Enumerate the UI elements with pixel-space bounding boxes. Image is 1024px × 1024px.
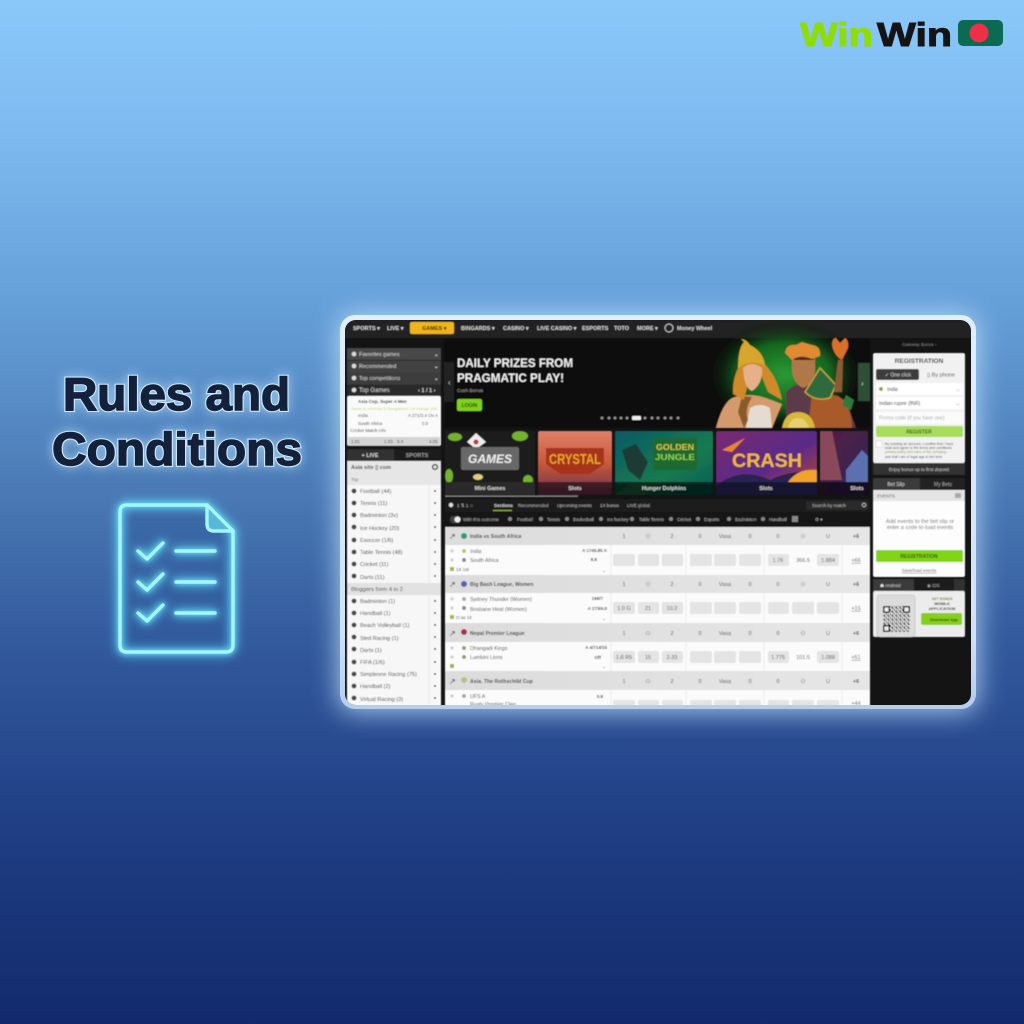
game category tiles: Slots (850, 486, 864, 492)
right column: gateway link: Gateway Bonus › (902, 342, 937, 347)
league: Big Bash League, Women: 0 (748, 582, 752, 588)
sport filter chips: Football (517, 517, 533, 522)
league: Asia The Rothschild Cup: 1 (622, 679, 626, 685)
league: Big Bash League, Women: ⌄ (602, 616, 606, 621)
league: Big Bash League, Women: 166/7 (592, 596, 603, 601)
league: Big Bash League, Women: 1 (622, 582, 626, 588)
man hair (785, 342, 820, 360)
left sidebar: sports tabs: + LIVE (362, 453, 379, 459)
left sidebar: top game card: Cricket Match info (350, 428, 387, 433)
filter toolbar: 1 ⇅ 1 ☆ (457, 503, 475, 508)
top navigation bar: MORE ▾ (637, 326, 659, 332)
league: India vs South Africa: 2 (670, 534, 674, 540)
registration panel: read and agree to the terms and conditions (885, 446, 952, 450)
league: Nepal Premier League (449, 629, 861, 669)
league: Asia The Rothschild Cup: 0.9 (597, 694, 603, 699)
sport filter chips: Tennis (547, 517, 561, 522)
staff flower (832, 338, 848, 360)
hero characters (716, 338, 856, 428)
left sidebar: sports list: Esoccer (1/6) (360, 538, 393, 544)
match odds table (445, 527, 870, 708)
left sidebar: sports list: Tennis (11) (360, 501, 387, 507)
league: Nepal Premier League: 101.5 (796, 655, 810, 661)
man face (792, 356, 815, 388)
registration panel (873, 353, 965, 475)
league: Big Bash League, Women: ↗ (449, 580, 456, 589)
logo: WinWin with flag: Win (800, 16, 873, 53)
left sidebar: top game card: South Africa (358, 421, 383, 426)
filter toolbar: Search by match (812, 503, 846, 508)
league: Nepal Premier League: 1 (622, 631, 626, 637)
league: Nepal Premier League: 0 (776, 631, 780, 637)
game category tiles: Slots (759, 486, 773, 492)
league: Big Bash League, Women: 21 (645, 606, 651, 612)
sport filter chips: ⚙ ▾ (815, 517, 823, 522)
title: Rules and Conditions (52, 368, 302, 475)
league: India vs South Africa: U (826, 534, 830, 540)
registration panel: India (887, 387, 898, 393)
league: Big Bash League, Women: ⚇ (646, 581, 651, 588)
QR code ticket (877, 595, 915, 637)
league: India vs South Africa: 0 (698, 534, 702, 540)
sport filter chips: Table Tennis (639, 517, 665, 522)
sport filter chips: Ice hockey (607, 517, 629, 522)
left sidebar: sports list: Cricket (11) (360, 562, 389, 568)
game category tiles: Slots (568, 486, 582, 492)
league: Nepal Premier League: 0 (698, 631, 702, 637)
league: Big Bash League, Women: U (826, 582, 830, 588)
sport filter chips (444, 515, 870, 528)
league: Nepal Premier League: 2 (670, 631, 674, 637)
league: Nepal Premier League: ↗ (449, 629, 456, 638)
sport filter chips: Esports (704, 517, 720, 522)
left sidebar: sports tabs: SPORTS (406, 453, 429, 459)
registration panel: Indian rupee (INR) (879, 401, 920, 407)
man armor (805, 368, 836, 399)
hero banner: › (861, 379, 864, 388)
league: Asia The Rothschild Cup: U (826, 679, 830, 685)
left sidebar: promo menu: Top Games (359, 388, 390, 394)
league: India vs South Africa: +6 (853, 534, 859, 540)
league: Asia The Rothschild Cup: 0 (748, 679, 752, 685)
left sidebar: top game card: 4.05 (429, 439, 438, 444)
sport filter chips: Handball (769, 517, 787, 522)
left sidebar: promo menu: ⌄ (434, 352, 439, 358)
league: Nepal Premier League: +51 (851, 655, 861, 661)
game category tiles (445, 431, 868, 497)
hero button: LOGIN (462, 403, 478, 409)
registration panel: ▯ By phone (927, 372, 955, 378)
left sidebar: top game card: 0.0 (422, 421, 428, 426)
league: Nepal Premier League: 1.8 R5 (616, 655, 632, 661)
title: Rules and Conditions: Conditions (52, 423, 302, 475)
league: India vs South Africa: 6.6 (591, 557, 597, 562)
left sidebar: sports list: Ice Hockey (20) (360, 526, 399, 532)
league: Nepal Premier League: ⌄ (602, 664, 606, 669)
league: Asia The Rothschild Cup: +44 (851, 701, 861, 707)
hero banner: ‹ (448, 378, 451, 387)
left sidebar: sports list: Badminton (1) (360, 599, 395, 605)
league: India vs South Africa: A 1745.85 A (582, 548, 608, 553)
sport filter chips: Cricket (677, 517, 692, 522)
league: Nepal Premier League: 15 (645, 655, 651, 661)
logo: WinWin with flag (800, 16, 1003, 53)
league: India vs South Africa: 1 (622, 534, 626, 540)
left sidebar: sports list: Asia site ▯ com (351, 465, 391, 471)
icon: checklist document (120, 505, 233, 652)
league: Nepal Premier League: 1.088 (821, 655, 835, 661)
tile label CRASH: CRASH (732, 450, 802, 472)
league: Nepal Premier League: ⚇ (646, 630, 651, 637)
title: Rules and Conditions: Rules and (63, 368, 290, 420)
registration panel: Enjoy bonus up to first deposit (889, 467, 950, 472)
filter toolbar (445, 499, 870, 512)
woman hair (733, 360, 782, 400)
league: Nepal Premier League: Nepal Premier League (470, 631, 525, 637)
title: Rules and Conditions: Rules and (63, 368, 290, 420)
league: Nepal Premier League: ⚇ (801, 630, 806, 637)
league: Nepal Premier League: 1.775 (771, 655, 785, 661)
bet slip panel: REGISTRATION (900, 554, 938, 560)
league: India vs South Africa: 1.76 (773, 558, 783, 564)
registration panel: ⌄ (956, 387, 960, 392)
tile label GAMES: GAMES (468, 452, 512, 466)
bet slip panel: My Bets (934, 482, 953, 488)
carousel dots (601, 416, 679, 420)
tile label forest slot: GOLDEN (656, 443, 694, 452)
league: Nepal Premier League: 2.33 (667, 655, 677, 661)
left sidebar: sports list: Simpleone Racing (75) (360, 672, 417, 678)
top navigation bar: ESPORTS (582, 326, 609, 332)
league: Big Bash League, Women: Vasa (719, 582, 732, 588)
league: Asia The Rothschild Cup: Rusty Premier Clan (470, 702, 516, 708)
league: Nepal Premier League: Lumbini Lions (470, 655, 503, 661)
left sidebar: top game card: Game is currently in Bangladesh 1st innings 158 (351, 406, 438, 411)
left sidebar: top game card: A 271/3.4 Ov A (408, 413, 438, 418)
league: Big Bash League, Women: ⚇ (801, 581, 806, 588)
hero banner (444, 330, 870, 429)
bet slip panel: Bet Slip (887, 482, 905, 488)
league: India vs South Africa: ⚇ (646, 533, 651, 540)
league: Big Bash League, Women: 1.0 G (617, 606, 631, 612)
league: Asia The Rothschild Cup: ↗ (449, 677, 456, 686)
left sidebar: top game card: 5.4 (397, 439, 404, 444)
league: Big Bash League, Women: +6 (853, 582, 859, 588)
league: Big Bash League, Women: Big Bash League, Women (470, 582, 534, 588)
hero subtext: Cash Bonus (457, 388, 484, 394)
league: Big Bash League, Women: 10.2 (667, 606, 677, 612)
league: India vs South Africa: 1.884 (821, 558, 835, 564)
app download panel: ◉ iOS (927, 583, 940, 588)
registration panel: ⌄ (956, 401, 960, 406)
hero heading line 2: PRAGMATIC PLAY! (457, 371, 564, 385)
league: India vs South Africa: ⚇ (801, 533, 806, 540)
app download panel: Download App (930, 617, 958, 622)
league: Big Bash League, Women: Brisbane Heat (Women) (470, 607, 527, 613)
top navigation bar: CASINO ▾ (503, 326, 530, 332)
sport filter chips: Badminton (735, 517, 757, 522)
registration panel: ✓ One click (885, 372, 912, 378)
league: India vs South Africa: +66 (851, 558, 861, 564)
game category tiles: Mini Games (475, 486, 505, 492)
league: Nepal Premier League: Off (594, 655, 601, 660)
league: Asia The Rothschild Cup: Asia. The Rothschild Cup (470, 679, 533, 685)
league: India vs South Africa: India (470, 549, 482, 555)
league: India vs South Africa: Vasa (719, 534, 732, 540)
bet slip panel: Add events to the bet slip or (886, 519, 954, 525)
man body (786, 384, 856, 428)
game category tiles: Hunger Dolphins (642, 486, 686, 492)
left sidebar: promo menu: ⌄ (434, 376, 439, 382)
left sidebar: sports list: Sled Racing (1) (360, 636, 399, 642)
league: Nepal Premier League: +6 (853, 631, 859, 637)
league: Big Bash League, Women: A 273/4.0 (588, 606, 607, 611)
logo: WinWin with flag: Win (877, 16, 952, 53)
woman body (716, 395, 782, 428)
league: Asia The Rothschild Cup: ⚇ (801, 678, 806, 685)
left sidebar: sports list: Darts (1) (360, 648, 382, 654)
filter toolbar: Recommended (518, 503, 549, 508)
registration panel: privacy policy and rules of the company (885, 450, 947, 454)
league: Asia The Rothschild Cup: 0 (698, 679, 702, 685)
app download panel (873, 579, 965, 637)
left sidebar: promo menu (347, 348, 441, 396)
left sidebar: sports list: Virtual Racing (3) (360, 697, 403, 703)
title: Rules and Conditions: Conditions (52, 423, 302, 475)
left sidebar: top game card: Asia Cup, Super 4 Men (358, 399, 407, 404)
left sidebar: promo menu: ‹ 1 / 1 › (418, 388, 436, 394)
filter toolbar: Upcoming events (557, 503, 593, 508)
screenshot content (345, 317, 971, 708)
league: Big Bash League, Women (449, 580, 861, 621)
left sidebar: sports list: Darts (11) (360, 575, 385, 581)
league: Nepal Premier League: Dhangadi Kings (470, 646, 508, 652)
left sidebar: sports list: Beach Volleyball (1) (360, 623, 410, 629)
league: India vs South Africa: ⌄ (602, 568, 606, 573)
league: Nepal Premier League: Vasa (719, 631, 732, 637)
top navigation bar: LIVE CASINO ▾ (537, 326, 578, 332)
left sidebar: sports list: Football (44) (360, 489, 392, 495)
league: India vs South Africa: South Africa (470, 558, 499, 564)
league: India vs South Africa: ↗ (449, 532, 456, 541)
league: Asia The Rothschild Cup: UFS A (470, 694, 486, 700)
left sidebar: promo menu: Recommended (359, 364, 396, 370)
woman helmet (738, 339, 765, 368)
woman face (743, 364, 762, 391)
title: Rules and Conditions: Rules and (63, 368, 290, 420)
league: India vs South Africa: 1X 1st (456, 567, 470, 572)
league: India vs South Africa (449, 532, 861, 573)
registration panel: REGISTRATION (895, 358, 944, 365)
bet slip panel (873, 478, 965, 577)
bet slip panel: enter a code to load events (887, 525, 953, 531)
hero button (457, 399, 482, 411)
left sidebar: promo menu: ⌄ (434, 364, 439, 370)
league: Asia The Rothschild Cup: ⚇ (646, 678, 651, 685)
registration panel: and that I am of legal age to bet here (885, 455, 942, 459)
league: Asia The Rothschild Cup (449, 677, 861, 708)
league: Big Bash League, Women: 2 (670, 582, 674, 588)
app download panel: GET BONUS (932, 597, 953, 601)
tile label CRYSTAL: CRYSTAL (549, 451, 601, 468)
top navigation bar: SPORTS ▾ (353, 326, 381, 332)
league: Big Bash League, Women: O as 10 (456, 615, 472, 620)
league: Nepal Premier League: U (826, 631, 830, 637)
league: Big Bash League, Women: Sydney Thunder (Women) (470, 597, 532, 603)
left sidebar: sports list: Bloggers form 4 in 2 (351, 587, 403, 593)
app download panel: MOBILE (934, 601, 950, 606)
league: Big Bash League, Women: +15 (851, 606, 861, 612)
sport filter chips: With this outcome (463, 517, 499, 522)
registration panel: By creating an account, I confirm that I have (885, 442, 953, 446)
app download panel: APPLICATION (929, 606, 956, 611)
left sidebar: top game card (347, 396, 441, 446)
left sidebar: sports list: Table Tennis (48) (360, 550, 403, 556)
game category tiles: JUNGLE (655, 453, 696, 462)
league: Asia The Rothschild Cup: 0 (776, 679, 780, 685)
league: Big Bash League, Women: 0 (776, 582, 780, 588)
hero heading: DAILY PRIZES FROM (457, 356, 573, 370)
top navigation bar: Money Wheel (677, 326, 713, 332)
filter toolbar: Sections (494, 503, 513, 508)
league: Asia The Rothschild Cup: 2 (670, 679, 674, 685)
registration panel: REGISTER (906, 430, 932, 436)
bet slip panel: EVENTS (877, 494, 895, 498)
league: Nepal Premier League: A 4/714/15 (585, 645, 607, 650)
league: India vs South Africa: 0 (748, 534, 752, 540)
left sidebar: sports list: Top (351, 477, 359, 482)
left sidebar: sports tabs (347, 449, 441, 461)
filter toolbar: 1X bonus (600, 503, 620, 508)
app download panel: ☗ Android (880, 583, 901, 588)
league: India vs South Africa: India vs South Africa (470, 534, 522, 540)
top navigation bar: GAMES ▾ (422, 326, 448, 332)
sport filter chips: Basketball (573, 517, 594, 522)
registration panel: Promo code (if you have one) (879, 416, 945, 422)
top navigation bar: LIVE ▾ (387, 326, 405, 332)
left sidebar: sports list: FIFA (1/6) (360, 660, 385, 666)
top navigation bar (345, 320, 971, 338)
left sidebar: sports list (347, 461, 441, 707)
league: Big Bash League, Women: 0 (698, 582, 702, 588)
league: India vs South Africa: 366.5 (796, 558, 810, 564)
left sidebar: promo menu: Top competitions (359, 376, 401, 382)
left sidebar: sports list: Handball (2) (360, 684, 391, 690)
left sidebar: top game card: India (358, 413, 368, 418)
league: Nepal Premier League: 0 (748, 631, 752, 637)
league: Asia The Rothschild Cup: Vasa (719, 679, 732, 685)
gold shield (782, 412, 815, 428)
filter toolbar: LIVE global (627, 503, 650, 508)
left sidebar: top game card: 1.81 (351, 439, 360, 444)
top navigation bar: TOTO (614, 326, 630, 332)
bet slip panel: Save/load events (902, 568, 937, 573)
left sidebar: sports list: Handball (1) (360, 611, 391, 617)
left sidebar: sports list: Badminton (3v) (360, 513, 398, 519)
left sidebar: top game card: 1.53 (384, 439, 393, 444)
browser screenshot frame (340, 315, 976, 709)
title: Rules and Conditions: Conditions (52, 423, 302, 475)
league: Asia The Rothschild Cup: +6 (853, 679, 859, 685)
glow behind browser screenshot (338, 314, 978, 712)
top navigation bar: BINGARDS ▾ (461, 326, 496, 332)
league: India vs South Africa: 0 (776, 534, 780, 540)
left sidebar: promo menu: Favorites games (359, 352, 400, 358)
